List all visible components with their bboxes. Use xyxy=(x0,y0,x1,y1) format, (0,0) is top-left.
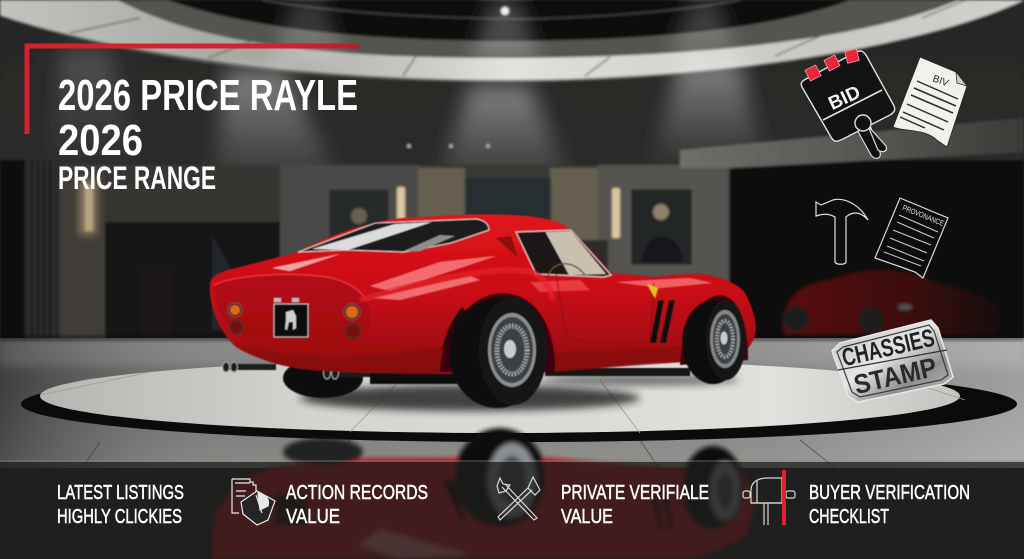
front tyre xyxy=(682,300,744,384)
icon: provenance document: PROVONANCE xyxy=(901,203,945,228)
icon: bill of sale document xyxy=(893,57,967,147)
item: latest listings: HIGHLY CLICKIES xyxy=(57,506,182,528)
wall painting right xyxy=(630,188,693,266)
wall sconces xyxy=(397,187,620,238)
item: private verifiale value: PRIVATE VERIFIALE xyxy=(561,482,709,504)
item: private verifiale value: VALUE xyxy=(561,506,613,528)
icon: chassis stamp: STAMP xyxy=(851,352,940,400)
body highlights xyxy=(272,254,712,300)
heading: 2026 price range xyxy=(58,71,358,196)
wall painting left xyxy=(329,189,389,250)
wall lower bays xyxy=(0,118,1024,345)
dim right garage xyxy=(729,160,1024,345)
prancing horse badge xyxy=(647,284,658,298)
spotlight cones xyxy=(50,0,765,195)
red Ferrari hero car xyxy=(210,214,756,408)
body xyxy=(210,214,756,374)
rear fascia xyxy=(214,274,370,344)
icon: auction records stack xyxy=(232,479,275,525)
ceiling ledge xyxy=(680,118,1024,168)
item: buyer verification checklist: CHECKLIST xyxy=(809,506,889,528)
door line xyxy=(556,274,654,343)
car reflection on floor xyxy=(212,428,756,559)
rear wheel arch xyxy=(440,293,555,372)
rear fender crease xyxy=(360,270,552,300)
exhaust pipes xyxy=(222,362,408,379)
item: latest listings xyxy=(57,482,184,528)
icon: chassis stamp: CHASSIES xyxy=(839,324,937,372)
item: private verifiale value xyxy=(561,482,709,528)
heading line 3: PRICE RANGE xyxy=(58,160,216,196)
icon: bill of sale document: BIV xyxy=(931,73,950,89)
rear tyre xyxy=(449,298,545,408)
heading line 1: 2026 PRICE RAYLE xyxy=(58,71,358,120)
bottom info band xyxy=(0,460,1024,559)
item: buyer verification checklist xyxy=(809,482,970,528)
rear brake vent xyxy=(442,307,465,353)
far rear tyre xyxy=(283,358,363,398)
front fender vents xyxy=(650,300,675,343)
heading line 2: 2026 xyxy=(58,116,143,165)
rear window xyxy=(298,219,489,252)
rear quarter vent xyxy=(496,236,518,258)
item: action records value: VALUE xyxy=(286,506,340,528)
icon: hammer outline xyxy=(816,199,868,264)
ceiling light ring xyxy=(0,0,1024,82)
side window xyxy=(516,230,611,277)
icon: bid paddle: BID xyxy=(825,82,864,115)
item: action records value xyxy=(286,482,428,528)
icon: provenance document xyxy=(875,198,948,278)
icon: verification lift xyxy=(743,470,795,525)
background: showroom wall and ceiling xyxy=(0,0,1024,345)
car contact shadow xyxy=(300,385,640,411)
icon: bid paddle xyxy=(801,49,895,158)
showroom floor xyxy=(0,335,1024,468)
distant red car xyxy=(782,270,1000,335)
item: action records value: ACTION RECORDS xyxy=(286,482,428,504)
icon: crossed tools xyxy=(497,477,540,520)
licence plate xyxy=(274,304,308,337)
item: latest listings: LATEST LISTINGS xyxy=(57,482,184,504)
lower sill shade xyxy=(240,344,742,373)
recessed ceiling dots xyxy=(407,144,490,148)
turntable platform xyxy=(21,359,1017,442)
heading accent bracket xyxy=(27,46,360,134)
item: buyer verification checklist: BUYER VERIFICATION xyxy=(809,482,970,504)
floor tile lines xyxy=(20,440,950,559)
icon: chassis stamp xyxy=(832,320,953,402)
front wheel arch xyxy=(680,295,748,365)
tail lights xyxy=(228,303,360,338)
